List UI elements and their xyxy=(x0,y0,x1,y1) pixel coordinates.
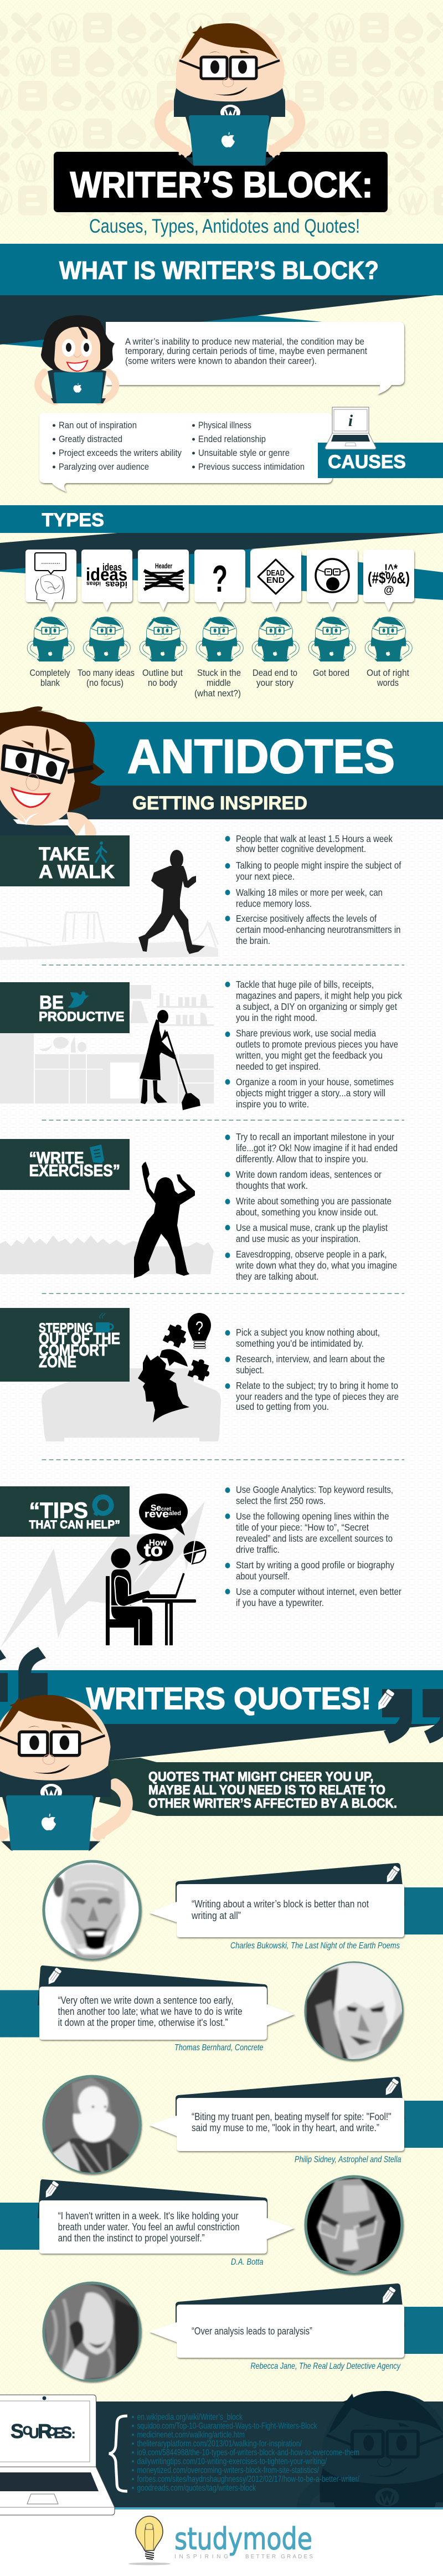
portrait xyxy=(44,2283,140,2382)
laptop with sources title: R xyxy=(38,2420,52,2442)
icon: info laptop: i xyxy=(348,412,353,430)
heading: BE xyxy=(39,992,64,1013)
portrait xyxy=(306,2177,402,2274)
head silhouette xyxy=(138,1349,189,1423)
heading: STEPPING xyxy=(39,1321,93,1336)
teal block xyxy=(404,1887,443,1934)
source links: goodreads.com/quotes/tag/writers-block xyxy=(137,2483,256,2493)
bubble: how to: to xyxy=(144,1540,163,1560)
panel: be productive xyxy=(0,979,402,1110)
icon: too many ideas: ideas xyxy=(86,565,127,584)
icon: too many ideas: ideas xyxy=(86,580,101,587)
bubble: secret revealed: Se xyxy=(151,1503,161,1513)
causes list: Project exceeds the writers ability xyxy=(59,448,182,458)
antidotes heading: ANTIDOTES xyxy=(127,730,395,783)
quote text: “I haven't written in a week. It's like holding your xyxy=(58,2210,239,2221)
icon: pencil xyxy=(46,1967,62,1986)
sweeping woman silhouette xyxy=(140,1010,200,1110)
source links: moneytized.com/overcoming-writers-block-from-site-statistics/ xyxy=(137,2466,319,2475)
icon: puzzle pieces xyxy=(163,1321,213,1382)
bullet list: life...got it? Ok! Now imagine if it had ended xyxy=(236,1142,398,1153)
bullet list: title of your piece: “How to”, “Secret xyxy=(236,1522,369,1533)
quote text: “Writing about a writer’s block is better than not xyxy=(192,1898,369,1910)
card xyxy=(39,2200,295,2254)
dark tab xyxy=(38,2179,267,2218)
laptop with sources title xyxy=(0,2395,115,2515)
subtitle: Causes, Types, Antidotes and Quotes! xyxy=(89,215,360,237)
sofa background xyxy=(42,1368,221,1441)
bullet list: and use music as your inspiration. xyxy=(236,1233,360,1244)
bullet list xyxy=(225,1327,399,1412)
dark wedge xyxy=(0,1724,443,1767)
bullet list: write down what they do, what you imagine xyxy=(235,1260,397,1271)
bullet list: Share previous work, use social media xyxy=(236,1028,376,1039)
heading band xyxy=(0,505,443,533)
bullet list: inspire you to write. xyxy=(236,1099,309,1110)
laptop with sources title: : xyxy=(71,2427,75,2441)
icon: question bulb: ? xyxy=(195,1318,203,1338)
source links: io9.com/5844988/the-10-types-of-writers-block-and-how-to-overcome-them xyxy=(137,2448,359,2457)
causes list: Greatly distracted xyxy=(59,434,122,444)
bullet list: about, something you know inside out. xyxy=(236,1207,378,1218)
source links xyxy=(132,2413,359,2493)
bullet list: Use Google Analytics: Top keyword results, xyxy=(236,1484,393,1495)
character: writer xyxy=(0,1695,127,1851)
park ground xyxy=(0,942,218,960)
type labels: (what next?) xyxy=(194,688,241,699)
bullet list xyxy=(225,1484,401,1608)
source links: theliteraryplatform.com/2013/01/walking-for-inspiration/ xyxy=(137,2439,302,2449)
definition text: temporary, during certain periods of time, maybe even permanent xyxy=(125,346,367,356)
person at laptop xyxy=(106,1548,196,1645)
type cards xyxy=(25,550,414,611)
heading line two: OUT OF THE xyxy=(39,1330,120,1348)
bullet list: Use a musical muse, crank up the playlist xyxy=(236,1222,388,1233)
teal flag behind wedge xyxy=(0,315,322,347)
source links: squidoo.com/Top-10-Guaranteed-Ways-to-Fight-Writers-Block xyxy=(137,2421,317,2431)
bullet list: needed to get inspired. xyxy=(236,1061,321,1072)
left quote marks xyxy=(0,1647,48,1702)
heading: TAKE xyxy=(39,844,90,865)
bullet list: you in the right mood. xyxy=(236,1012,317,1023)
tagline: INSPIRING xyxy=(174,2554,228,2560)
icon: symbols for out of right words xyxy=(368,562,410,596)
heading box xyxy=(0,1486,130,1537)
bullet list: Research, interview, and learn about the xyxy=(236,1353,385,1364)
heading: WHAT IS WRITER’S BLOCK? xyxy=(59,256,379,285)
heading line two: PRODUCTIVE xyxy=(39,1009,124,1024)
quote 5 xyxy=(44,2283,443,2382)
icon: question bulb xyxy=(188,1313,211,1348)
icon: pencil xyxy=(380,2286,396,2305)
heading line four: ZONE xyxy=(39,1353,76,1371)
portrait xyxy=(44,2076,140,2174)
heading box xyxy=(0,982,130,1033)
quote 4 xyxy=(0,2177,402,2274)
bullet list: Walking 18 miles or more per week, can xyxy=(236,887,383,898)
kitchen background xyxy=(0,985,214,1104)
icon: symbols for out of right words: (#$%&) xyxy=(368,569,410,587)
laptop with sources title: E xyxy=(54,2424,64,2441)
source links: forbes.com/sites/haydnshaughnessy/2012/02/17/how-to-be-a-better-writer/ xyxy=(137,2475,359,2484)
bullet list: subject. xyxy=(236,1364,264,1376)
background icon rows xyxy=(0,12,443,216)
icon: too many ideas: ideas xyxy=(105,579,127,589)
getting inspired band xyxy=(0,786,443,819)
white footer xyxy=(0,2510,443,2576)
causes heading box: CAUSES xyxy=(328,451,406,473)
attribution: Charles Bukowski, The Last Night of the Earth Poems xyxy=(230,1941,400,1951)
causes list: Ran out of inspiration xyxy=(59,420,137,430)
teal block xyxy=(0,1990,39,2038)
quote intro text: MAYBE ALL YOU NEED IS TO RELATE TO xyxy=(148,1783,385,1798)
portrait xyxy=(305,1962,404,2061)
quote text: then another too late; what we have to do is write xyxy=(58,2006,243,2017)
quote 2 xyxy=(0,1962,404,2061)
bullet list: select the first 250 rows. xyxy=(236,1495,326,1506)
icon: dead end sign: END xyxy=(266,576,285,585)
quote text xyxy=(192,2111,392,2133)
heading line two: THAT CAN HELP” xyxy=(29,1518,120,1531)
heading: “WRITE xyxy=(29,1149,84,1167)
icon: speech ring xyxy=(95,1497,111,1515)
bullet list: Write down random ideas, sentences or xyxy=(236,1169,382,1180)
bullet list: Use a computer without internet, even better xyxy=(236,1586,401,1597)
source links: en.wikipedia.org/wiki/Writer’s_block xyxy=(137,2413,243,2422)
type labels: your story xyxy=(256,678,293,688)
bullet list: used to getting from you. xyxy=(236,1401,329,1412)
icon: pencil xyxy=(43,2180,59,2199)
icon: question mark: ? xyxy=(212,558,228,600)
heading box xyxy=(0,1139,130,1190)
icon: symbols for out of right words: !^* xyxy=(384,562,398,576)
icon: bird xyxy=(68,991,89,1008)
icon: light bulb xyxy=(128,2516,171,2565)
section: what is writer's block xyxy=(0,244,443,347)
quote text xyxy=(58,2210,240,2244)
type labels: Completely xyxy=(30,668,70,678)
bullet list: Eavesdropping, observe people in a park, xyxy=(236,1249,387,1260)
bullet list: outlets to promote previous pieces you have xyxy=(236,1039,398,1050)
definition speech bubble xyxy=(106,322,404,394)
crowd background xyxy=(0,1235,214,1274)
character: writer with laptop xyxy=(160,23,300,166)
quote text: “Biting my truant pen, beating myself for spite: "Fool!" xyxy=(192,2111,392,2122)
heading: TYPES xyxy=(42,510,104,531)
laptop with sources title: S xyxy=(61,2424,72,2442)
type labels: Stuck in the xyxy=(197,668,241,678)
type labels: words xyxy=(377,678,399,688)
bullet list: written, you might get the feedback you xyxy=(235,1050,383,1061)
causes list: Ended relationship xyxy=(198,434,266,444)
type labels: no body xyxy=(148,678,177,688)
teal flag xyxy=(0,543,443,600)
causes speech bubble xyxy=(39,413,332,492)
bullet list xyxy=(225,1131,398,1282)
bullet list: Relate to the subject; try to bring it home to xyxy=(236,1380,398,1391)
bullet list: differently. Allow that to inspire you. xyxy=(236,1153,368,1164)
heading box xyxy=(0,835,130,886)
bullet list xyxy=(225,979,402,1110)
icon: outline but no body xyxy=(144,562,184,589)
quote intro banner xyxy=(99,1758,443,1816)
bullet list: about yourself. xyxy=(236,1571,290,1582)
heading box xyxy=(0,1308,130,1382)
heading line two: EXERCISES” xyxy=(29,1162,120,1180)
quote intro text xyxy=(148,1769,397,1811)
icon: pencil xyxy=(384,1865,400,1884)
quote text: said my muse to me, "look in thy heart, and write.” xyxy=(192,2122,379,2133)
type labels: Outline but xyxy=(142,668,183,678)
type labels: Dead end to xyxy=(253,668,297,678)
bullet list: Tackle that huge pile of bills, receipts, xyxy=(236,979,374,990)
quote intro text: OTHER WRITER’S AFFECTED BY A BLOCK. xyxy=(148,1796,397,1811)
type labels: Got bored xyxy=(313,668,349,678)
bullet list: your readers and the type of pieces they are xyxy=(236,1391,399,1402)
icon: pie chart xyxy=(184,1540,206,1566)
panel: take a walk xyxy=(0,833,401,960)
logo: studymode xyxy=(128,2516,313,2565)
bullet list: reduce memory loss. xyxy=(236,898,312,909)
quote text: breath under water. You feel an awful constriction xyxy=(58,2221,240,2233)
bullet list: Pick a subject you know nothing about, xyxy=(236,1327,380,1338)
icon: pencil xyxy=(375,1689,395,1712)
brace xyxy=(109,2416,127,2491)
causes list: Unsuitable style or genre xyxy=(198,448,290,458)
source links: medicinenet.com/walking/article.htm xyxy=(137,2430,245,2440)
bubble: secret revealed: cret xyxy=(161,1506,172,1512)
quote text: “Very often we write down a sentence too early, xyxy=(58,1995,234,2006)
bullet list: they are talking about. xyxy=(236,1271,319,1282)
heading band xyxy=(0,244,443,295)
main title: WRITER’S BLOCK: xyxy=(70,164,373,205)
blue strip xyxy=(0,2507,443,2510)
quote text xyxy=(191,1898,369,1921)
bullet list: Use the following opening lines within the xyxy=(236,1511,389,1522)
quote 3 xyxy=(44,2076,443,2174)
icon: pencil xyxy=(383,2078,399,2097)
card xyxy=(39,1987,295,2040)
bullet list: Try to recall an important milestone in your xyxy=(236,1131,394,1142)
tagline xyxy=(174,2554,313,2560)
teal block xyxy=(0,2203,39,2250)
wordmark: studymode xyxy=(174,2522,312,2556)
bullet list: Start by writing a good profile or biography xyxy=(236,1559,394,1571)
icon: outline but no body: Header xyxy=(155,562,172,570)
white panel pattern xyxy=(0,819,443,1670)
section: writers quotes header xyxy=(0,1647,443,1851)
icon: mug xyxy=(96,1313,113,1332)
dark tab xyxy=(176,1863,405,1906)
bullet list: a subject, a DIY on organizing or simply get xyxy=(236,1001,397,1012)
heading line two: A WALK xyxy=(39,861,115,882)
type labels: Out of right xyxy=(367,668,409,678)
quote text: “Over analysis leads to paralysis” xyxy=(192,2326,312,2337)
portrait xyxy=(44,1861,140,1961)
runner silhouette xyxy=(138,850,205,954)
card xyxy=(149,2305,404,2358)
bullet list: your next piece. xyxy=(236,871,295,882)
bullet list: thoughts that work. xyxy=(236,1180,308,1191)
icon: walker xyxy=(96,841,106,862)
heading band xyxy=(0,1670,443,1724)
bullet list: something you’d be intimidated by. xyxy=(236,1338,364,1349)
right quote marks xyxy=(382,1689,443,1743)
title block xyxy=(54,152,388,212)
antidotes heading band xyxy=(0,722,443,786)
laptop with sources title: S xyxy=(11,2420,24,2442)
park background xyxy=(0,912,218,948)
laptop with sources title: O xyxy=(23,2424,32,2438)
bullet list: show better cognitive development. xyxy=(236,843,366,854)
causes list xyxy=(53,420,305,472)
causes list: Previous success intimidation xyxy=(198,461,305,472)
bubble: secret revealed: aled xyxy=(169,1510,181,1517)
dancer silhouette xyxy=(134,1162,195,1278)
heading line three: COMFORT xyxy=(39,1342,107,1359)
quote text: writing at all” xyxy=(191,1910,241,1921)
type labels: middle xyxy=(207,678,231,688)
bullet list: Talking to people might inspire the subject of xyxy=(236,860,401,871)
bullet list: objects might trigger a story...a story will xyxy=(236,1087,385,1099)
bullet list: Write about something you are passionate xyxy=(236,1195,392,1207)
type labels: (no focus) xyxy=(86,678,123,688)
causes list: Paralyzing over audience xyxy=(59,461,149,472)
teal block xyxy=(404,2101,443,2148)
attribution: Thomas Bernhard, Concrete xyxy=(174,2043,264,2052)
definition text: (some writers were known to abandon their career). xyxy=(125,356,317,366)
dark tab xyxy=(176,2077,405,2119)
section: types xyxy=(0,505,443,600)
icon: bored face xyxy=(316,559,349,592)
teal block xyxy=(404,2307,443,2354)
dark tab xyxy=(38,1966,267,2005)
laptop with sources title: C xyxy=(47,2425,56,2439)
quote text xyxy=(58,1995,243,2028)
bullet list: certain mood-enhancing neurotransmitters in xyxy=(236,924,401,935)
card xyxy=(149,2098,404,2151)
attribution: D.A. Botta xyxy=(231,2257,264,2267)
panel: stepping out of the comfort zone xyxy=(0,1308,399,1441)
source links: dailywritingtips.com/10-writing-exercises-to-tighten-your-writing/ xyxy=(137,2457,327,2466)
attribution: Philip Sidney, Astrophel and Stella xyxy=(295,2155,401,2164)
card xyxy=(149,1884,404,1937)
icon: info laptop xyxy=(325,407,376,449)
zigzag arrow background xyxy=(0,1501,205,1648)
causes list: Physical illness xyxy=(198,420,251,430)
definition text xyxy=(125,336,367,366)
bullet list: magazines and papers, it might help you pick xyxy=(236,990,402,1001)
quote text: and then the instinct to propel yourself.” xyxy=(58,2233,205,2244)
type labels: Too many ideas xyxy=(78,668,135,678)
bullet list: if you have a typewriter. xyxy=(236,1597,324,1608)
heading: WRITERS QUOTES! xyxy=(86,1681,372,1716)
icon: too many ideas xyxy=(86,562,127,589)
bullet list: revealed” and lists are excellent sources to xyxy=(236,1533,393,1544)
panel: write exercises xyxy=(0,1131,398,1282)
causes heading box xyxy=(318,443,443,478)
section: sources xyxy=(0,2391,443,2576)
laptop with sources title: U xyxy=(29,2425,39,2441)
white antidotes panel xyxy=(0,819,443,1670)
quote intro text: QUOTES THAT MIGHT CHEER YOU UP, xyxy=(148,1769,373,1784)
tagline: BETTER GRADES xyxy=(245,2554,313,2560)
ghost writer character xyxy=(320,2391,443,2507)
dark wedge xyxy=(0,533,443,570)
definition text: A writer’s inability to produce new material, the condition may be xyxy=(125,336,364,347)
attribution: Rebecca Jane, The Real Lady Detective Agency xyxy=(250,2362,401,2371)
dark tab xyxy=(176,2283,405,2327)
bubble: secret revealed xyxy=(139,1494,188,1536)
bullet list: drive traffic. xyxy=(236,1544,280,1555)
character: woman large xyxy=(0,706,105,837)
bubble: how to: How xyxy=(149,1538,167,1548)
icon: dead end sign: DEAD xyxy=(266,569,285,578)
dark wedge xyxy=(0,295,435,345)
heading: “TIPS xyxy=(29,1499,88,1523)
quote 1 xyxy=(44,1861,443,1961)
character: woman with laptop xyxy=(38,315,116,403)
icon: too many ideas: ideas xyxy=(102,562,122,573)
bullet list xyxy=(225,833,401,946)
quote text: it down at the proper time, otherwise it's lost.” xyxy=(58,2017,228,2028)
type labels xyxy=(30,668,409,699)
bullet list: the brain. xyxy=(236,935,270,946)
icon: dead end sign xyxy=(258,560,293,594)
panel: tips that can help xyxy=(0,1484,401,1648)
bubble: secret revealed: reve xyxy=(145,1508,169,1520)
bullet list: Exercise positively affects the levels of xyxy=(236,913,377,924)
icon: document xyxy=(90,1145,104,1163)
icon: completely blank xyxy=(35,553,66,601)
type labels: blank xyxy=(40,678,60,688)
bullet list: Organize a room in your house, sometimes xyxy=(236,1076,394,1087)
getting inspired heading: GETTING INSPIRED xyxy=(132,793,307,814)
mini writer characters xyxy=(29,617,410,661)
icon: symbols for out of right words: @ xyxy=(384,584,394,596)
bullet list: People that walk at least 1.5 Hours a week xyxy=(236,833,393,844)
dark band xyxy=(0,2401,443,2507)
bubble: how to xyxy=(137,1533,173,1566)
